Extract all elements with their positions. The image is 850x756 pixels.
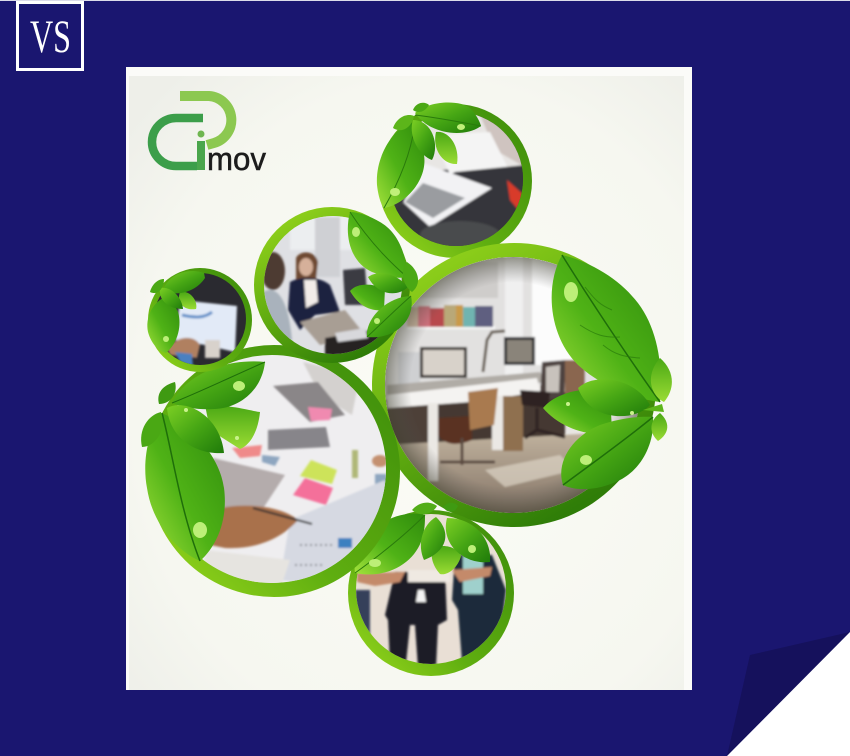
circle: team	[348, 503, 514, 676]
leaves	[377, 103, 481, 208]
CiMOV logo: mov	[207, 141, 266, 177]
office photo	[385, 255, 650, 520]
desk photo	[205, 362, 390, 590]
circle: calculator desk	[141, 345, 400, 597]
circle: top laptop	[377, 103, 532, 260]
white picture card	[126, 67, 692, 690]
meeting photo	[264, 216, 378, 354]
chart photo	[167, 300, 237, 368]
laptop photo	[396, 114, 523, 246]
circle: chart	[147, 268, 252, 372]
leaf cluster	[348, 212, 418, 337]
circle: meeting	[254, 207, 418, 363]
big leaf cluster	[543, 255, 672, 489]
team photo	[355, 555, 506, 668]
leaf cluster	[141, 361, 265, 561]
VS brand badge	[18, 2, 82, 70]
VS brand badge: VS	[30, 11, 71, 63]
folded page corner	[727, 632, 850, 756]
CiMOV logo	[152, 96, 266, 177]
leaf cluster	[147, 271, 205, 353]
leaf cluster	[355, 503, 490, 574]
circle: office	[372, 243, 672, 527]
